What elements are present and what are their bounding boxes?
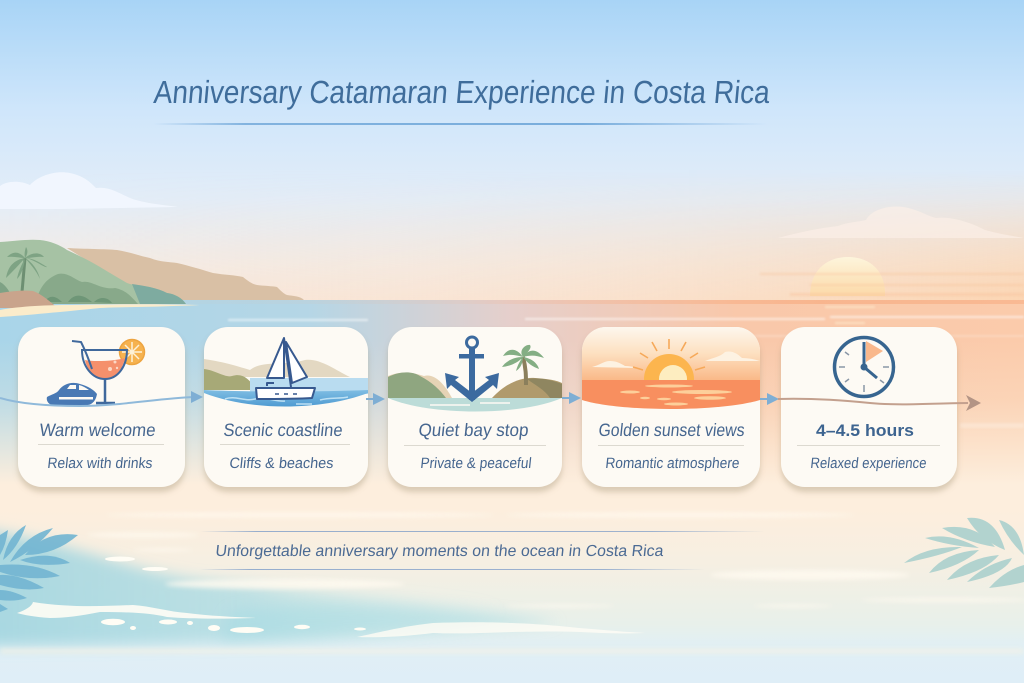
palm tree [6, 247, 47, 292]
card: quiet bay stop [388, 327, 562, 487]
arrow: bay to sunset [562, 392, 581, 404]
title underline [153, 123, 768, 125]
decorative palm leaf right [904, 518, 1024, 588]
tagline top rule [200, 531, 765, 532]
arrow: duration timeline [778, 395, 981, 411]
heading: Scenic coastline [223, 420, 344, 440]
background: sky [0, 0, 1024, 302]
subheading: Relaxed experience [810, 455, 927, 472]
cloud right [778, 206, 1024, 238]
setting sun [760, 257, 1024, 324]
scene: sunset over sea [582, 327, 760, 409]
arrow: sunset to duration [760, 393, 779, 405]
foreground water [0, 512, 1024, 654]
background: sea [0, 300, 1024, 683]
arrow: coastline to bay [366, 393, 385, 405]
card: warm welcome [18, 327, 185, 487]
distant headland [67, 248, 304, 300]
heading: Quiet bay stop [418, 420, 530, 440]
scene: coastline hills and water [204, 359, 368, 406]
title: Anniversary Catamaran Experience in Costa Rica [152, 74, 772, 110]
heading: Warm welcome [39, 420, 157, 440]
icon: anchor [445, 337, 499, 402]
scene: bay hills and water [388, 372, 562, 412]
card: 4-4.5 hours [781, 327, 957, 487]
card: golden sunset views [582, 327, 760, 487]
icon: clock [834, 338, 894, 396]
icon: motorboat [47, 383, 97, 405]
icon: sailboat [256, 338, 315, 399]
card: scenic coastline [204, 327, 368, 487]
tagline bottom rule [200, 569, 705, 570]
heading: Golden sunset views [598, 420, 746, 440]
subheading: Private & peaceful [420, 455, 532, 472]
heading: 4–4.5 hours [816, 421, 914, 440]
cloud left [0, 172, 178, 209]
icon: palm tree [502, 345, 544, 385]
subheading: Romantic atmosphere [605, 455, 740, 472]
subheading: Cliffs & beaches [229, 455, 334, 472]
icon: cocktail glass [72, 340, 144, 403]
arrow: welcome to coastline [0, 391, 203, 406]
green hills with palm and rocks [0, 240, 200, 317]
decorative palm leaf left [0, 525, 78, 612]
subheading: Relax with drinks [47, 455, 153, 472]
tagline: Unforgettable anniversary moments on the ocean in Costa Rica [215, 542, 665, 560]
